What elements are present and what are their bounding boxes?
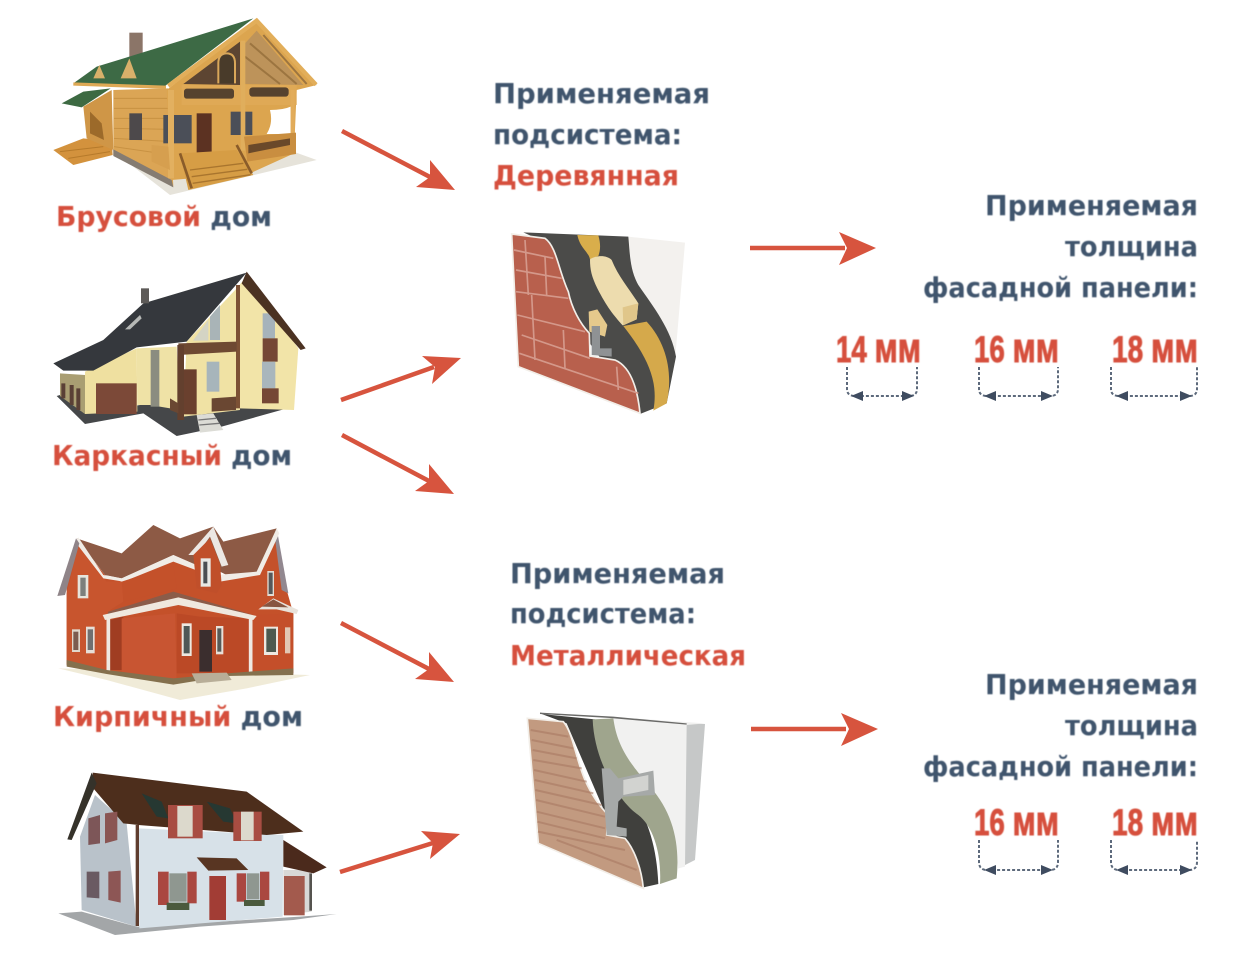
heading: metal subsystem bbox=[510, 557, 746, 672]
label: frame house: Каркасный дом bbox=[52, 439, 292, 472]
thickness: 16 mm bbox=[974, 324, 1059, 401]
label: brick house: Кирпичный дом bbox=[53, 700, 303, 733]
arrow: frame house to metal subsystem bbox=[342, 435, 454, 494]
icon: frame house bbox=[53, 272, 306, 436]
heading: wooden subsystem: Применяемая bbox=[493, 77, 710, 110]
arrow: plaster house to metal subsystem bbox=[340, 831, 460, 872]
arrows bbox=[340, 131, 878, 872]
heading: metal subsystem thickness: толщина bbox=[1065, 709, 1198, 742]
icon: metal subsystem wall section bbox=[527, 713, 705, 888]
heading: metal subsystem: Металлическая bbox=[510, 639, 746, 672]
arrow: metal subsystem to thickness bbox=[751, 713, 878, 746]
thickness: 14 mm: 14 мм bbox=[836, 324, 921, 371]
icon: brick house bbox=[57, 525, 310, 700]
heading: metal subsystem thickness: Применяемая bbox=[985, 668, 1198, 701]
arrow: timber house to wooden subsystem bbox=[342, 131, 455, 190]
icon: plaster house bbox=[58, 773, 337, 935]
thickness: 18 mm bbox=[1111, 324, 1198, 401]
heading: metal subsystem thickness: фасадной панели: bbox=[923, 750, 1198, 783]
thickness: 18 mm: 18 мм bbox=[1112, 324, 1198, 371]
heading: wooden subsystem bbox=[493, 77, 710, 192]
heading: wooden subsystem thickness: Применяемая bbox=[985, 189, 1198, 222]
label: timber house: Брусовой дом bbox=[56, 200, 272, 233]
thickness: 16 mm: 16 мм bbox=[974, 797, 1059, 844]
thickness: 16 mm bbox=[974, 797, 1059, 875]
heading: wooden subsystem thickness: фасадной панели: bbox=[923, 271, 1198, 304]
arrow: brick house to metal subsystem bbox=[341, 623, 454, 682]
arrow: frame house to wooden subsystem bbox=[341, 356, 461, 400]
heading: wooden subsystem thickness bbox=[923, 189, 1198, 304]
heading: metal subsystem: подсистема: bbox=[510, 597, 696, 630]
heading: wooden subsystem thickness: толщина bbox=[1065, 230, 1198, 263]
thickness: 14 mm bbox=[836, 324, 921, 401]
heading: wooden subsystem: Деревянная bbox=[493, 159, 679, 192]
thickness: 18 mm bbox=[1111, 797, 1198, 875]
heading: metal subsystem: Применяемая bbox=[510, 557, 725, 590]
heading: metal subsystem thickness bbox=[923, 668, 1198, 783]
heading: wooden subsystem: подсистема: bbox=[493, 118, 682, 151]
arrow: wooden subsystem to thickness bbox=[750, 232, 876, 265]
icon: wooden subsystem wall section bbox=[512, 232, 685, 414]
icon: timber house bbox=[53, 18, 317, 195]
thickness: 18 mm: 18 мм bbox=[1112, 797, 1198, 844]
thickness: 16 mm: 16 мм bbox=[974, 324, 1059, 371]
